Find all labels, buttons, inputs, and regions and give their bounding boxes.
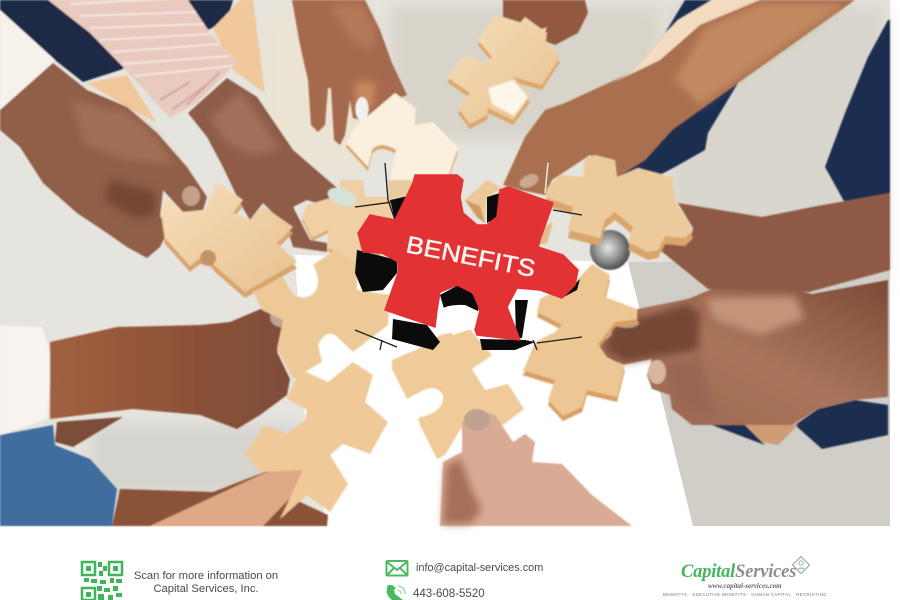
hand: right big: [598, 280, 888, 425]
hand: top left: [0, 63, 207, 258]
piece: top centre: [346, 93, 458, 184]
text: scan for more information: [134, 570, 278, 595]
arm: top right: [503, 0, 855, 195]
hand: upper left pointing: [188, 78, 357, 252]
navy shirt top left: [0, 0, 233, 82]
tan wrist under big hand: [745, 425, 798, 445]
reflective ball: [590, 230, 630, 270]
label: BENEFITS: BENEFITS: [404, 231, 538, 283]
qr code icon: [82, 562, 122, 600]
piece: left holding: [161, 182, 297, 298]
striped pink sleeve: [48, 0, 237, 118]
icon: envelope: [386, 561, 408, 576]
piece: mid left: [253, 250, 390, 379]
jeans bottom left: [0, 425, 117, 526]
piece: mid right: [522, 264, 637, 421]
piece: tab in notch: [388, 180, 553, 245]
nail: upper left: [325, 184, 359, 210]
piece: bottom centre: [392, 329, 524, 459]
piece: right of red: [545, 155, 693, 260]
hand: bottom left: [112, 462, 328, 526]
logo: Capital Services: CapitalServices: [681, 562, 796, 582]
hand: top small: [503, 0, 588, 45]
hand: left: [50, 305, 293, 429]
text: scan for more information: Scan for more information on: [134, 570, 278, 582]
logo: tagline: BENEFITS · EXECUTIVE BENEFITS · HUMAN CAPITAL · RECRUITING: [663, 592, 827, 597]
white sleeve left: [0, 325, 52, 435]
white sleeve top left: [0, 10, 55, 110]
logo diamond icon: [793, 557, 809, 573]
hand: right upper: [660, 193, 890, 292]
white gap under red piece: [440, 305, 480, 335]
hole: black shadow behind red piece: [355, 193, 580, 350]
text: phone: 443-608-5520: [413, 588, 485, 600]
navy trousers right: [617, 0, 890, 449]
piece: bottom left: [245, 362, 388, 519]
hand: under left: [55, 417, 123, 447]
red puzzle piece: [358, 175, 578, 340]
hand: bottom centre: [440, 409, 632, 526]
piece: behind left: [302, 180, 392, 265]
icon: phone: [387, 585, 405, 600]
tan arm behind sleeve: [87, 0, 265, 123]
piece: top right: [447, 15, 560, 129]
nail: top centre: [356, 97, 368, 121]
cracks: [355, 163, 582, 350]
hand: top centre: [292, 0, 407, 145]
text: scan for more information: Capital Services, Inc.: [153, 583, 259, 595]
logo: website: www.capital-services.com: [708, 582, 782, 590]
text: email: info@capital-services.com: [416, 562, 543, 574]
